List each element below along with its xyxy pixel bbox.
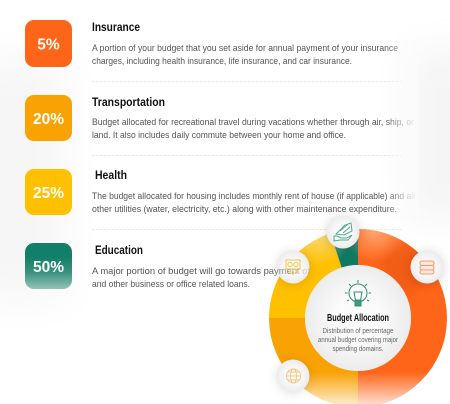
heading: Budget Allocation: Budget Allocation	[327, 313, 389, 324]
text: centre description	[318, 328, 399, 353]
segment: teal 5%	[330, 229, 358, 268]
heading: Education: Education	[95, 243, 143, 257]
row: health	[25, 168, 415, 215]
segment: amber 25%	[269, 318, 358, 404]
text: health description	[92, 191, 415, 214]
text: insurance description: charges, including health insurance, life insurance, and car insurance.	[92, 56, 352, 66]
ring highlights	[299, 229, 427, 404]
text: transportation description: Budget allocated for recreational travel during vacations whether through air, ship, or	[92, 117, 414, 127]
icon circle: banknotes	[276, 250, 310, 285]
heading: Transportation: Transportation	[92, 95, 165, 109]
row: transportation	[25, 95, 414, 141]
row: education	[25, 243, 250, 289]
badge: 5%: 5%	[37, 36, 60, 54]
heading: Health: Health	[95, 168, 127, 182]
icon circle: globe	[276, 360, 310, 394]
text: transportation description: land. It also includes daily commute between your home and office.	[92, 130, 346, 140]
icon circle: money hand	[326, 216, 360, 250]
text fade overlay	[385, 40, 417, 220]
badge: 20%: 20%	[33, 111, 64, 128]
text: health description: The budget allocated for housing includes monthly rent of house (if applicable) and all	[92, 191, 415, 201]
segment: yellow 20%	[269, 233, 342, 318]
heading: Insurance: Insurance	[92, 20, 140, 34]
row: insurance	[25, 20, 398, 67]
text: education description, second line: and other business or office related loans.	[92, 279, 250, 289]
text: education description, first line: A major portion of budget will go towards payment of	[92, 266, 310, 276]
icon circle: coins	[410, 250, 444, 285]
donut chart	[269, 229, 447, 404]
text: centre description: annual budget covering major	[318, 337, 399, 344]
centre circle	[305, 265, 411, 371]
text: centre description: Distribution of percentage	[322, 328, 394, 335]
text: insurance description: A portion of your budget that you set aside for annual payment of your insurance	[92, 43, 398, 53]
segment: orange 50%	[358, 229, 447, 404]
icon: light bulb	[345, 280, 371, 306]
badge: 20%	[25, 95, 72, 141]
badge: 50%: 50%	[33, 259, 64, 276]
badge: 50%	[25, 243, 72, 289]
badge: 5%	[25, 20, 72, 67]
text: insurance description	[92, 43, 398, 66]
badge: 25%	[25, 169, 72, 215]
text: transportation description	[92, 117, 414, 140]
badge: 25%: 25%	[33, 185, 64, 202]
text: health description: other utilities (water, electricity, etc.) along with other maintenance expenditure.	[92, 204, 397, 214]
text: centre description: spending domains.	[332, 346, 384, 353]
